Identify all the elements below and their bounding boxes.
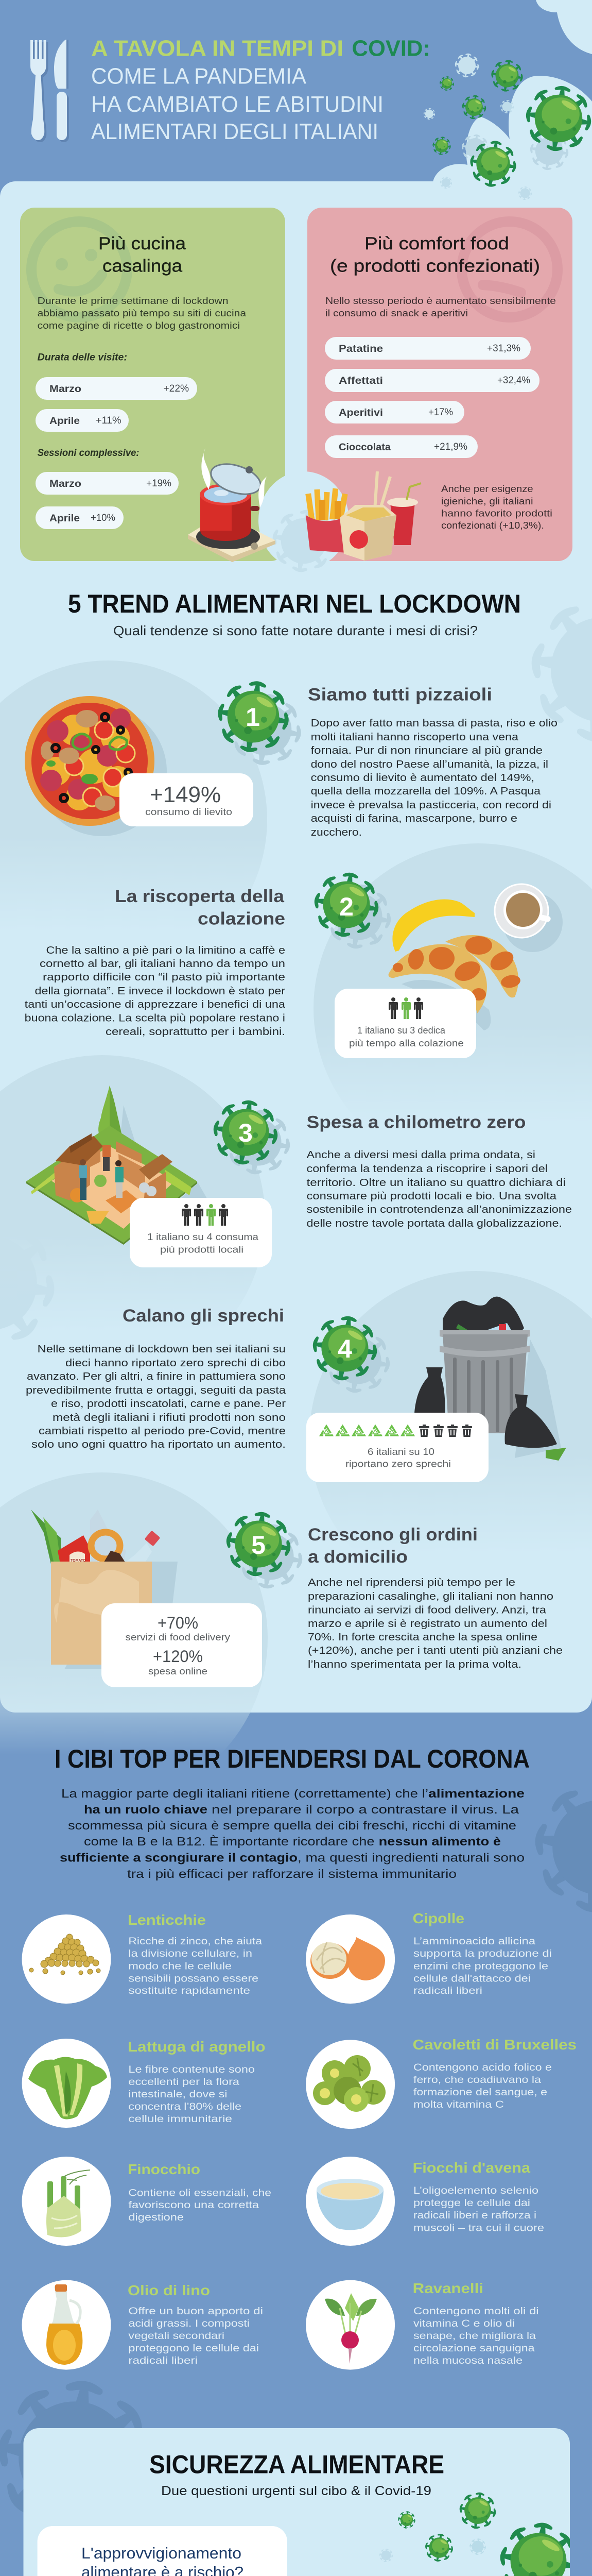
text block: rapporto difficile con “il pasto più importante — [43, 972, 285, 983]
label and text: eccellenti per la flora — [128, 2077, 240, 2088]
icon: virus number 2 — [314, 872, 392, 950]
label and text: Fiocchi d'avena — [413, 2160, 530, 2176]
text block — [325, 295, 556, 318]
card: approvvigionamento: L'approvvigionamento — [81, 2544, 241, 2562]
label and text: muscoli – tra cui il cuore — [413, 2223, 544, 2234]
bar: cioccolata: Cioccolata — [339, 442, 391, 453]
icon: grocery bag — [31, 1510, 178, 1669]
text block: della giornata”. E invece il lockdown è stato per — [35, 986, 285, 997]
heading — [115, 887, 285, 928]
label and text: Cipolle — [413, 1910, 464, 1926]
trend 4: calano gli sprechi — [26, 1297, 566, 1482]
text block: intro foods: La maggior parte degli italiani ritiene (correttamente) che l’ — [61, 1787, 428, 1800]
label and text: Contiene oli essenziali, che — [128, 2188, 271, 2199]
label and text: sensibili possano essere — [128, 1973, 258, 1985]
bar: patatine: Patatine — [339, 344, 383, 354]
heading: i cibi top: I CIBI TOP PER DIFENDERSI DAL CORONA — [55, 1744, 530, 1773]
background circle trend 5 — [0, 1472, 268, 1804]
text block — [25, 945, 286, 1038]
label and text — [413, 2037, 577, 2110]
text block: Dopo aver fatto man bassa di pasta, riso e olio — [311, 718, 558, 729]
label and text — [413, 2160, 544, 2234]
text block: tanti un’occasione di apprezzare i benefici di una — [25, 999, 286, 1010]
text block: il consumo di snack e aperitivi — [325, 308, 468, 318]
ghost virus: right of trends — [529, 596, 592, 744]
heading: Crescono gli ordini — [308, 1525, 478, 1545]
ghost virus: section foods — [533, 1781, 592, 1914]
text block: prodotti confezionati: igieniche, gli italiani — [441, 496, 533, 506]
label and text — [128, 2039, 266, 2125]
text block: Che la saltino a piè pari o la limitino a caffè e — [46, 945, 285, 956]
icon: virus number 1: 1 — [246, 703, 260, 732]
icon: grocery bag: TOMATO — [71, 1559, 86, 1563]
text block: avanzato. Per gli altri, a finire in pattumiera sono — [27, 1371, 286, 1382]
icon: croissants — [389, 935, 521, 1030]
label and text: Offre un buon apporto di — [128, 2306, 263, 2317]
trend 1: pizza — [25, 680, 558, 838]
label and text: formazione del sangue, e — [413, 2087, 547, 2098]
heading: 5 trend alimentari: 5 TREND ALIMENTARI NEL LOCKDOWN — [68, 589, 521, 618]
heading — [330, 234, 540, 276]
header section — [30, 36, 430, 144]
label and text: la divisione cellulare, in — [128, 1948, 252, 1959]
label and text: digestione — [128, 2212, 184, 2223]
callout: +149%: consumo di lievito — [145, 806, 232, 817]
text block: abbiamo passato più tempo su siti di cucina — [38, 308, 247, 318]
background circle trend 3 — [0, 1055, 265, 1381]
label and text: protegge le cellule dai — [413, 2198, 530, 2209]
callout: 1 italiano su 4: 1 italiano su 4 consuma — [147, 1231, 259, 1242]
heading: Spesa a chilometro zero — [307, 1113, 526, 1132]
heading: SICUREZZA ALIMENTARE — [149, 2450, 444, 2479]
text block: Anche a diversi mesi dalla prima ondata, si — [307, 1149, 535, 1161]
bar: cioccolata — [325, 435, 478, 458]
bar: marzo: +22% — [164, 383, 189, 394]
trend 2: colazione — [25, 872, 563, 1058]
label and text — [413, 1910, 552, 1996]
callout: +149% — [119, 773, 253, 826]
label and text: proteggono le cellule dai — [128, 2343, 259, 2354]
title — [91, 36, 430, 144]
text block: marzo e aprile si è registrato un aumento del — [308, 1618, 547, 1630]
icon: pizza — [25, 696, 167, 836]
bar: aprile sessioni: +10% — [91, 513, 115, 523]
food: cipolle — [306, 1910, 552, 2004]
bar: affettati: Affettati — [339, 376, 383, 386]
text block: sostenibile in controtendenza all’anonimizzazione — [307, 1204, 572, 1215]
label and text: vitamina C e olio di — [413, 2318, 515, 2329]
label and text: cellule immunitarie — [128, 2114, 232, 2125]
label and text: molta vitamina C — [413, 2099, 504, 2110]
label and text: L’amminoacido allicina — [413, 1936, 536, 1947]
bar: aprile — [36, 409, 129, 432]
icon: banana — [392, 899, 475, 952]
text block: solo uno ogni quattro ha riportato un aumento. — [31, 1439, 286, 1450]
text block: Nelle settimane di lockdown ben sei italiani su — [38, 1344, 286, 1355]
text block: 70%. In forte crescita anche la spesa online — [308, 1632, 537, 1643]
label and text: Olio di lino — [128, 2282, 210, 2298]
bar: aprile sessioni — [36, 506, 124, 529]
bar: aperitivi: +17% — [428, 407, 453, 418]
text block: prevedibilmente frutta e ortaggi, seguiti da pasta — [26, 1385, 286, 1396]
label: sessioni complessive: Sessioni complessive: — [38, 448, 140, 459]
text block: Anche nel riprendersi più tempo per le — [308, 1577, 515, 1588]
bar: cioccolata: +21,9% — [434, 442, 467, 452]
subtitle: Due questioni urgenti sul cibo & il Covid-19 — [161, 2484, 431, 2498]
heading: Calano gli sprechi — [123, 1306, 284, 1326]
label and text: enzimi che proteggono le — [413, 1961, 548, 1972]
heading: (e prodotti confezionati) — [330, 257, 540, 276]
text block: invece è prevalsa la pasticceria, con record di — [311, 800, 551, 811]
text block: intro foods: alimentazione — [428, 1787, 525, 1800]
title: COME LA PANDEMIA — [91, 64, 307, 89]
icon: virus number 4 — [312, 1315, 391, 1394]
blue band below light panel — [0, 1713, 592, 1721]
card: approvvigionamento — [38, 2526, 287, 2576]
bar: patatine: +31,3% — [487, 343, 520, 354]
text block: (+120%), anche per i tanti utenti più anziani che — [308, 1645, 563, 1656]
icon: virus number 5 — [225, 1511, 303, 1589]
bar: aprile sessioni: Aprile — [49, 513, 80, 524]
text block: conferma la tendenza a riscoprire i sapori del — [307, 1163, 548, 1175]
label: durata delle visite: Durata delle visite: — [38, 352, 127, 363]
text block: fornaia. Pur di non rinunciare al più grande — [311, 745, 543, 756]
bar: aprile: Aprile — [49, 416, 80, 427]
text block: l’hanno sperimentata per la prima volta. — [308, 1659, 521, 1670]
text block — [311, 718, 558, 838]
heading: Siamo tutti pizzaioli — [308, 685, 492, 705]
icon: radish — [306, 2280, 395, 2370]
text block: quella della mozzarella del 109%. A Pasqua — [311, 786, 541, 797]
text block: consumo di lievito è aumentato del 149%, — [311, 772, 534, 784]
text block: intro foods: nel preparare il corpo a contrastare il virus. La — [212, 1803, 519, 1816]
ghost virus: left of trends — [0, 1216, 56, 1349]
bar: marzo sessioni — [36, 472, 179, 495]
callout: +149%: +149% — [150, 782, 221, 807]
title: ALIMENTARI DEGLI ITALIANI — [91, 119, 378, 144]
text block: prodotti confezionati: confezionati (+10,3%). — [441, 520, 544, 531]
text block: metà degli italiani i rifiuti prodotti non sono — [53, 1412, 286, 1423]
label and text: modo che le cellule — [128, 1961, 232, 1972]
text block: prodotti confezionati: Anche per esigenze — [441, 483, 533, 494]
callout: 1 italiano su 4: più prodotti locali — [160, 1244, 243, 1255]
label and text: Cavoletti di Bruxelles — [413, 2037, 577, 2053]
heading: 5 trend alimentari — [68, 589, 521, 638]
heading: La riscoperta della — [115, 887, 285, 906]
text block: Nello stesso periodo è aumentato sensibilmente — [325, 295, 556, 306]
callout: +70% +120%: spesa online — [148, 1666, 207, 1676]
label and text: vegetali secondari — [128, 2331, 224, 2342]
food: ravanelli — [306, 2280, 539, 2370]
text block: dono del nostro Paese all’umanità, la pizza, il — [311, 759, 548, 770]
label and text: acidi grassi. I composti — [128, 2318, 250, 2329]
text block: buona colazione. La scelta più popolare restano i — [25, 1013, 285, 1024]
label and text: L’oligoelemento selenio — [413, 2185, 538, 2196]
bar: aprile: +11% — [96, 415, 121, 426]
icon: sad face — [462, 222, 558, 317]
text block: intro foods: tra i più efficaci per rafforzare il sistema immunitario — [127, 1867, 457, 1880]
label and text — [413, 2280, 539, 2366]
label and text: intestinale, dove si — [128, 2089, 228, 2100]
text block: cambiati rispetto al periodo pre-Covid, mentre — [39, 1426, 286, 1437]
callout: 6 italiani su 10: riportano zero sprechi — [345, 1458, 451, 1469]
clouds and viruses in header — [424, 0, 592, 206]
icon: virus number 4: 4 — [338, 1334, 352, 1363]
background circle trend 4 — [309, 1271, 592, 1604]
text block: molti italiani hanno riscoperto una vena — [311, 732, 519, 743]
text block — [308, 1577, 563, 1670]
text block — [38, 295, 247, 331]
text block: delle nostre tavole portata dalla globalizzazione. — [307, 1218, 562, 1229]
heading: a domicilio — [308, 1547, 408, 1567]
label and text: ferro, che coadiuvano la — [413, 2075, 542, 2086]
label and text: Lattuga di agnello — [128, 2039, 266, 2055]
title: A TAVOLA IN TEMPI DI — [91, 36, 343, 61]
label and text: Finocchio — [128, 2161, 200, 2177]
bar: affettati — [325, 369, 539, 392]
label and text: radicali liberi e rafforza i — [413, 2210, 536, 2221]
callout: 1 italiano su 3: più tempo alla colazione — [349, 1038, 464, 1048]
text block: intro foods: nessun alimento è — [379, 1835, 501, 1848]
icon: virus number 1 — [217, 680, 302, 766]
icon: trash can with bags — [414, 1297, 566, 1461]
text block: e riso, prodotti inscatolati, carne e pane. Per — [51, 1398, 286, 1410]
icon: virus number 3 — [213, 1099, 291, 1175]
food: fiocchi d'avena — [306, 2157, 544, 2246]
ghost virus: left of safety panel — [0, 2379, 153, 2536]
label and text — [128, 2161, 271, 2223]
panel: più cucina casalinga — [20, 208, 285, 561]
bar: marzo: Marzo — [49, 384, 81, 395]
cloud between panels — [258, 471, 349, 573]
icon: fennel — [22, 2157, 111, 2246]
light content panel — [0, 181, 592, 1713]
label and text: cellule dall'attacco dei — [413, 1973, 531, 1985]
callout: 6 italiani su 10 — [306, 1413, 489, 1482]
background circle trend 2 — [314, 843, 592, 1173]
food: olio di lino — [22, 2280, 263, 2370]
bar: aperitivi: Aperitivi — [339, 408, 383, 418]
icon: virus number 3: 3 — [238, 1118, 253, 1147]
text block: rinunciato ai servizi di food delivery. Anzi, tra — [308, 1605, 547, 1616]
bar: marzo — [36, 377, 197, 400]
callout: +70% +120%: +120% — [153, 1647, 203, 1666]
icon: bowl of oats — [306, 2157, 395, 2246]
text block: consumare più prodotti locali e bio. Una svolta — [307, 1191, 557, 1202]
panel: più comfort food — [307, 208, 572, 561]
text block: preparazioni casalinghe, gli italiani non hanno — [308, 1591, 553, 1602]
text block: territorio. Oltre un italiano su quattro dichiara di — [307, 1177, 566, 1189]
heading: casalinga — [102, 257, 182, 276]
trend 3: spesa a chilometro zero — [26, 1086, 572, 1267]
subtitle: Quali tendenze si sono fatte notare durante i mesi di crisi? — [113, 623, 478, 638]
label and text: Lenticchie — [128, 1912, 206, 1928]
text block: intro foods: ha un ruolo chiave — [84, 1803, 207, 1816]
food: lenticchie — [22, 1912, 263, 2004]
callout: +70% +120%: servizi di food delivery — [126, 1632, 231, 1642]
label and text: circolazione sanguigna — [413, 2343, 535, 2354]
text block: cereali, soprattutto per i bambini. — [106, 1026, 285, 1038]
icon: farmers market — [26, 1086, 211, 1245]
label and text: concentra l’80% delle — [128, 2102, 241, 2112]
bar: patatine — [325, 337, 531, 360]
text block: dieci hanno riportato zero sprechi di cibo — [65, 1358, 286, 1369]
icon: lettuce — [22, 2039, 111, 2128]
label and text: Contengono acido folico e — [413, 2062, 552, 2073]
title: HA CAMBIATO LE ABITUDINI — [91, 92, 384, 117]
icon: smiley — [31, 222, 127, 317]
label and text: Ricche di zinco, che aiuta — [128, 1936, 263, 1947]
text block: intro foods — [60, 1787, 525, 1880]
heading: Più cucina — [98, 234, 186, 253]
callout: +70% +120% — [101, 1603, 262, 1687]
icon: fork and knife — [30, 40, 69, 142]
callout: 1 italiano su 4 — [130, 1198, 272, 1267]
label and text: radicali liberi — [413, 1986, 482, 1996]
text block — [307, 1149, 572, 1229]
icon: fries noodle box and cup — [305, 471, 421, 561]
text block: intro foods: sufficiente a scongiurare il contagio — [60, 1851, 298, 1865]
heading — [308, 1525, 478, 1567]
heading: Più comfort food — [364, 234, 509, 253]
panel: sicurezza alimentare — [24, 2428, 578, 2576]
heading — [98, 234, 186, 276]
title: COVID: — [352, 36, 430, 61]
label and text — [128, 1912, 263, 1996]
icon: boiling pot on stove — [188, 448, 275, 562]
text block: Durante le prime settimane di lockdown — [38, 295, 229, 306]
text block: acquisti di farina, mascarpone, burro e — [311, 813, 517, 824]
label and text: sostituite rapidamente — [128, 1986, 250, 1996]
food: cavoletti di bruxelles — [306, 2037, 577, 2129]
viruses top right — [379, 2492, 578, 2576]
background circle trend 1 — [0, 660, 267, 979]
label and text: nella mucosa nasale — [413, 2355, 523, 2366]
callout: 1 italiano su 3 — [335, 989, 476, 1058]
text block: zucchero. — [311, 827, 362, 838]
text block: intro foods: , ma questi ingredienti naturali sono — [298, 1851, 525, 1865]
text block: prodotti confezionati — [441, 483, 552, 531]
icon: lentils — [22, 1914, 111, 2004]
text block: intro foods: come la B e la B12. È importante ricordare che — [84, 1835, 375, 1848]
text block: prodotti confezionati: hanno favorito prodotti — [441, 508, 552, 518]
callout: +70% +120%: +70% — [158, 1614, 198, 1632]
text block: come pagine di ricette o blog gastronomici — [38, 320, 240, 331]
trend 5: ordini a domicilio — [31, 1510, 563, 1687]
icon: coffee cup — [495, 884, 563, 952]
food: finocchio — [22, 2157, 271, 2246]
food: lattuga di agnello — [22, 2039, 266, 2128]
label and text: Le fibre contenute sono — [128, 2064, 255, 2075]
icon: virus number 5: 5 — [251, 1531, 266, 1560]
heading: colazione — [198, 909, 285, 928]
label and text: favoriscono una corretta — [128, 2200, 259, 2211]
label and text: supporta la produzione di — [413, 1948, 552, 1959]
callout: 1 italiano su 3: 1 italiano su 3 dedica — [357, 1025, 446, 1036]
bar: affettati: +32,4% — [497, 375, 530, 386]
text block: cornetto al bar, gli italiani hanno da tempo un — [40, 958, 285, 970]
text block: intro foods: scommessa più sicura è sempre quella dei cibi freschi, ricchi di vitamine — [68, 1819, 516, 1832]
icon: oil bottle — [22, 2280, 111, 2370]
icon: virus number 2: 2 — [339, 892, 354, 921]
label and text — [128, 2282, 263, 2366]
label and text: senape, che migliora la — [413, 2331, 536, 2342]
icon: onions — [306, 1914, 395, 2004]
bar: marzo sessioni: +19% — [146, 478, 171, 489]
text block — [26, 1344, 286, 1450]
label and text: Ravanelli — [413, 2280, 483, 2296]
bar: marzo sessioni: Marzo — [49, 479, 81, 489]
bar: aperitivi — [325, 401, 464, 423]
icon: brussels sprouts — [306, 2040, 395, 2129]
callout: 6 italiani su 10: 6 italiani su 10 — [368, 1446, 434, 1457]
label and text: Contengono molti oli di — [413, 2306, 539, 2317]
label and text: radicali liberi — [128, 2355, 198, 2366]
